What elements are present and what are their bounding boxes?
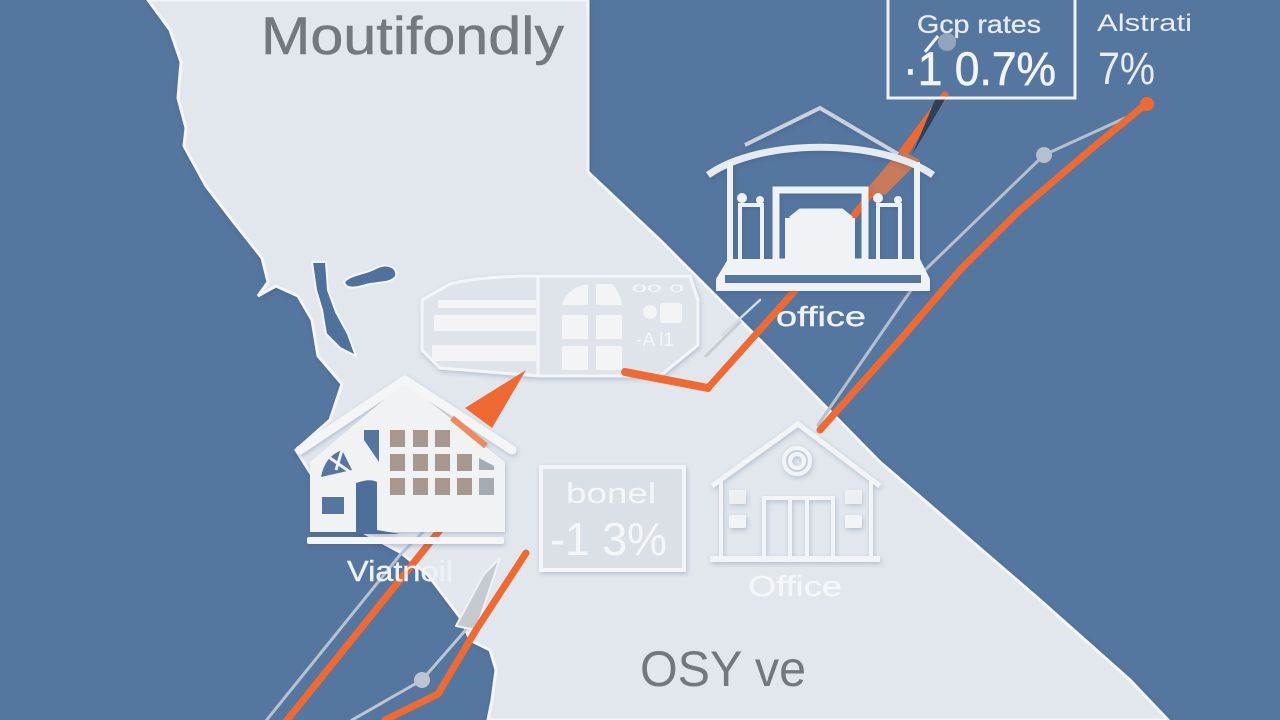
icon: mall on land: [422, 276, 698, 376]
callout: top rate: [888, 0, 1075, 98]
callout value: -1 3%: [550, 513, 667, 565]
callout: lower rate: [541, 467, 684, 570]
right trend lines: [818, 97, 1154, 430]
home base: [307, 537, 504, 544]
callout label: bonel: [566, 478, 656, 510]
map: land area: [148, 0, 1168, 720]
label: upper building: office: [776, 301, 866, 332]
label: home: Viatnoil: [347, 556, 453, 588]
label: office: Office: [748, 571, 842, 603]
orange pointer to mall: [465, 370, 526, 428]
home window grid: [390, 430, 494, 495]
icon: office building on land: [710, 424, 880, 559]
map: small lake: [344, 266, 396, 288]
icon: upper building on blue: [708, 108, 933, 291]
map: long lake: [312, 262, 356, 356]
icon: home with grid windows: [300, 380, 512, 544]
statistic value: 7%: [1098, 43, 1155, 94]
home left facade cut-outs: [356, 480, 400, 534]
title: Moutifondly: [261, 7, 565, 66]
home roof: [300, 380, 512, 450]
statistic: right: [1097, 10, 1192, 94]
callout value: ·1 0.7%: [903, 42, 1056, 95]
label: lower map name: OSY ve: [640, 641, 806, 697]
statistic label: Alstrati: [1097, 10, 1192, 37]
upper orange wedge and line behind building: [706, 95, 947, 388]
mall windows: [562, 284, 622, 370]
icon: mall on land: oo o: [632, 279, 684, 295]
callout label: Gcp rates: [917, 11, 1041, 39]
lower left trend lines: [265, 530, 526, 720]
mall small text: -A l1: [636, 330, 674, 351]
orange line start over mall: [625, 372, 708, 388]
mall bars: [432, 300, 536, 361]
